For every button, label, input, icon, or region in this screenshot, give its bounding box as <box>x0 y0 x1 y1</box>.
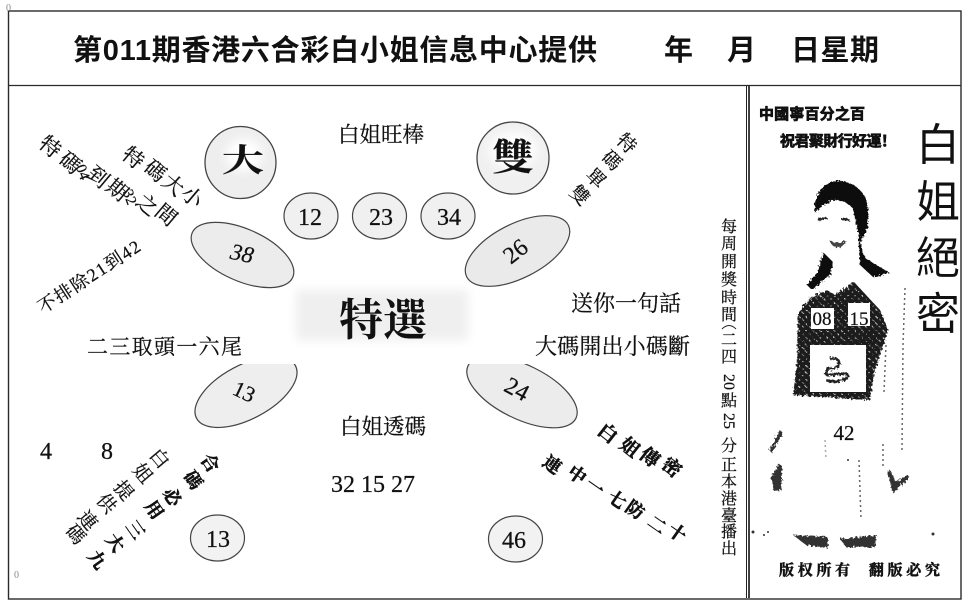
vertical text: draw time: 出 <box>721 540 737 558</box>
poster title: 白姐絕密: 姐 <box>916 178 960 227</box>
feature label: 特選: 特選 <box>339 296 431 345</box>
text: 白姐提供連碼 <box>61 444 174 549</box>
vertical text: draw time: 四 <box>721 349 737 366</box>
text: 合碼必用三大九: 合 <box>197 450 223 476</box>
text: 合碼必用三大九: 九 <box>84 547 110 573</box>
poster headline: 祝君聚財行好運！ <box>780 133 896 150</box>
vertical text: draw time: 點 <box>721 392 737 410</box>
number ovals top row <box>284 193 475 239</box>
oval: 38: 38 <box>227 239 256 268</box>
text: 白姐提供連碼: 姐 <box>128 459 157 488</box>
text: 連中一七防二十: 十 <box>664 520 690 546</box>
vertical text: draw time: 播 <box>721 523 737 541</box>
corner mark bottom: 0 <box>14 570 19 581</box>
text: 白姐傳密: 姐 <box>615 433 644 462</box>
number ovals top row: 34 <box>437 205 461 231</box>
text: 特碼單雙: 特 <box>612 129 641 158</box>
numbers: 32 15 27: 32 15 27 <box>331 472 415 498</box>
oval: bottom 46 <box>488 516 542 562</box>
corner mark top: 0 <box>6 3 11 14</box>
poster title: 白姐絕密: 密 <box>916 290 960 339</box>
text: 送你一句話: 送你一句話 <box>571 291 681 316</box>
text: 特碼單雙 <box>565 129 641 210</box>
icon: dragon <box>826 358 848 381</box>
text: 合碼必用三大九: 碼 <box>180 467 206 493</box>
vertical text: draw time: 間 <box>721 306 737 324</box>
text: 特碼單雙: 碼 <box>597 146 626 175</box>
oval: 38 <box>182 209 303 301</box>
oval: 24 <box>466 364 578 428</box>
oval: bottom 13: 13 <box>206 527 230 553</box>
vertical text: draw time: 20 <box>720 374 737 390</box>
text: 特碼04到期32之間: 碼 <box>54 147 86 179</box>
text: 合碼必用三大九: 必 <box>159 484 187 512</box>
number boxes on dress: 15 <box>850 309 868 330</box>
text: 連中一七防二十: 一 <box>582 474 608 500</box>
photo: woman <box>793 181 890 400</box>
vertical text: draw time: 周 <box>721 235 737 253</box>
text: 特碼大小: 碼 <box>139 155 171 187</box>
vertical text: draw time: 開 <box>721 253 737 271</box>
text: 特碼大小: 大 <box>157 169 189 201</box>
oval: 24: 24 <box>500 373 533 407</box>
text: 白姐傳密: 白 <box>593 419 622 448</box>
circle: 雙: 雙 <box>492 138 534 179</box>
heading: 白姐旺棒: 白姐旺棒 <box>338 123 424 147</box>
text: 特碼大小: 小 <box>176 181 209 214</box>
vertical text: draw time: 獎 <box>721 271 737 289</box>
text: 大碼開出小碼斷: 大碼開出小碼斷 <box>535 334 690 359</box>
oval: 13: 13 <box>229 376 259 408</box>
text: 特碼04到期32之間: 04 <box>72 163 92 183</box>
text: 合碼必用三大九: 三 <box>122 517 148 543</box>
title: 月 <box>727 35 756 67</box>
text: 白姐傳密: 密 <box>657 452 687 483</box>
panel: side poster <box>746 86 960 598</box>
text: 白姐傳密 <box>593 419 687 483</box>
circle: 雙 <box>477 122 549 194</box>
title: 第011期香港六合彩白小姐信息中心提供 <box>73 34 597 67</box>
text: 特碼04到期32之間: 期 <box>101 174 133 206</box>
text: 白姐提供連碼: 碼 <box>61 520 90 549</box>
number boxes on dress <box>810 303 870 392</box>
text: 白姐透碼: 白姐透碼 <box>340 415 426 439</box>
photo speckle: arms, legs and hem <box>752 288 934 548</box>
text: 不排除21到42: 不排除21到42 <box>34 236 144 317</box>
number ovals top row: 23 <box>369 205 393 231</box>
vertical text: draw time: 港 <box>721 490 737 508</box>
title: 日星期 <box>791 34 879 67</box>
numbers: 4 8 <box>40 439 113 465</box>
text: 連中一七防二十 <box>539 452 690 546</box>
number ovals top row: 12 <box>298 205 322 231</box>
vertical text: draw time: 臺 <box>721 507 737 525</box>
text: 連中一七防二十: 二 <box>644 512 670 538</box>
text: 特碼單雙: 單 <box>581 164 610 193</box>
oval: 26: 26 <box>499 234 533 270</box>
text: 特碼04到期32之間: 到 <box>82 161 114 193</box>
poster title: 白姐絕密: 白 <box>916 121 960 170</box>
vertical text: draw time: 25 <box>720 413 737 429</box>
text: 連中一七防二十: 連 <box>539 452 565 478</box>
text: 特碼04到期32之間 <box>34 131 182 231</box>
circle: 大 <box>205 126 276 198</box>
numbers: 4 8: 8 <box>101 439 113 465</box>
text: 特碼04到期32之間: 32 <box>119 188 139 207</box>
text: 特碼單雙: 雙 <box>565 181 594 210</box>
vertical text: draw time <box>720 218 737 558</box>
text: 合碼必用三大九: 大 <box>102 530 128 556</box>
text: 特碼04到期32之間: 間 <box>150 199 182 231</box>
text: 特碼大小 <box>117 142 209 214</box>
poster headline <box>759 105 896 150</box>
text: 特碼大小: 特 <box>117 142 149 174</box>
circle: 大: 大 <box>222 143 264 179</box>
text: 特碼04到期32之間: 之 <box>131 189 163 221</box>
vertical text: draw time: 本 <box>721 473 737 491</box>
text: 白姐提供連碼: 白 <box>145 444 174 473</box>
text: 特碼04到期32之間: 特 <box>34 131 66 163</box>
text: 合碼必用三大九 <box>84 450 223 573</box>
number: 42: 42 <box>834 421 854 445</box>
poster headline: 中國寧百分之百 <box>759 105 865 123</box>
text: 白姐提供連碼: 供 <box>92 489 121 519</box>
text: 合碼必用三大九: 用 <box>141 497 167 523</box>
number boxes on dress: 08 <box>812 309 832 330</box>
oval: 26 <box>454 201 581 301</box>
vertical text: draw time: 每 <box>721 218 737 236</box>
poster title: 白姐絕密 <box>916 121 960 339</box>
vertical text: draw time: 二 <box>721 332 737 349</box>
title <box>73 34 879 67</box>
vertical text: draw time: 正 <box>721 456 737 474</box>
text: 連中一七防二十: 七 <box>604 487 630 513</box>
vertical text: draw time: 分 <box>721 437 737 455</box>
vertical text: draw time: 時 <box>721 289 737 307</box>
copyright line: 版权所有 翻版必究 <box>779 561 940 579</box>
text: 連中一七防二十: 防 <box>622 497 648 523</box>
text: 二三取頭一六尾: 二三取頭一六尾 <box>87 335 242 359</box>
text: 連中一七防二十: 中 <box>564 462 590 488</box>
oval: bottom 13 <box>190 515 244 561</box>
poster title: 白姐絕密: 絕 <box>916 234 960 283</box>
text: 白姐提供連碼: 連 <box>73 506 102 535</box>
text: 白姐傳密: 傳 <box>635 443 664 472</box>
title: 年 <box>664 34 693 67</box>
text: 白姐提供連碼: 提 <box>109 476 138 505</box>
oval: 13 <box>194 364 298 428</box>
oval: bottom 46: 46 <box>502 528 526 554</box>
numbers: 4 8: 4 <box>40 439 52 465</box>
feature label: 特選 <box>296 290 468 345</box>
